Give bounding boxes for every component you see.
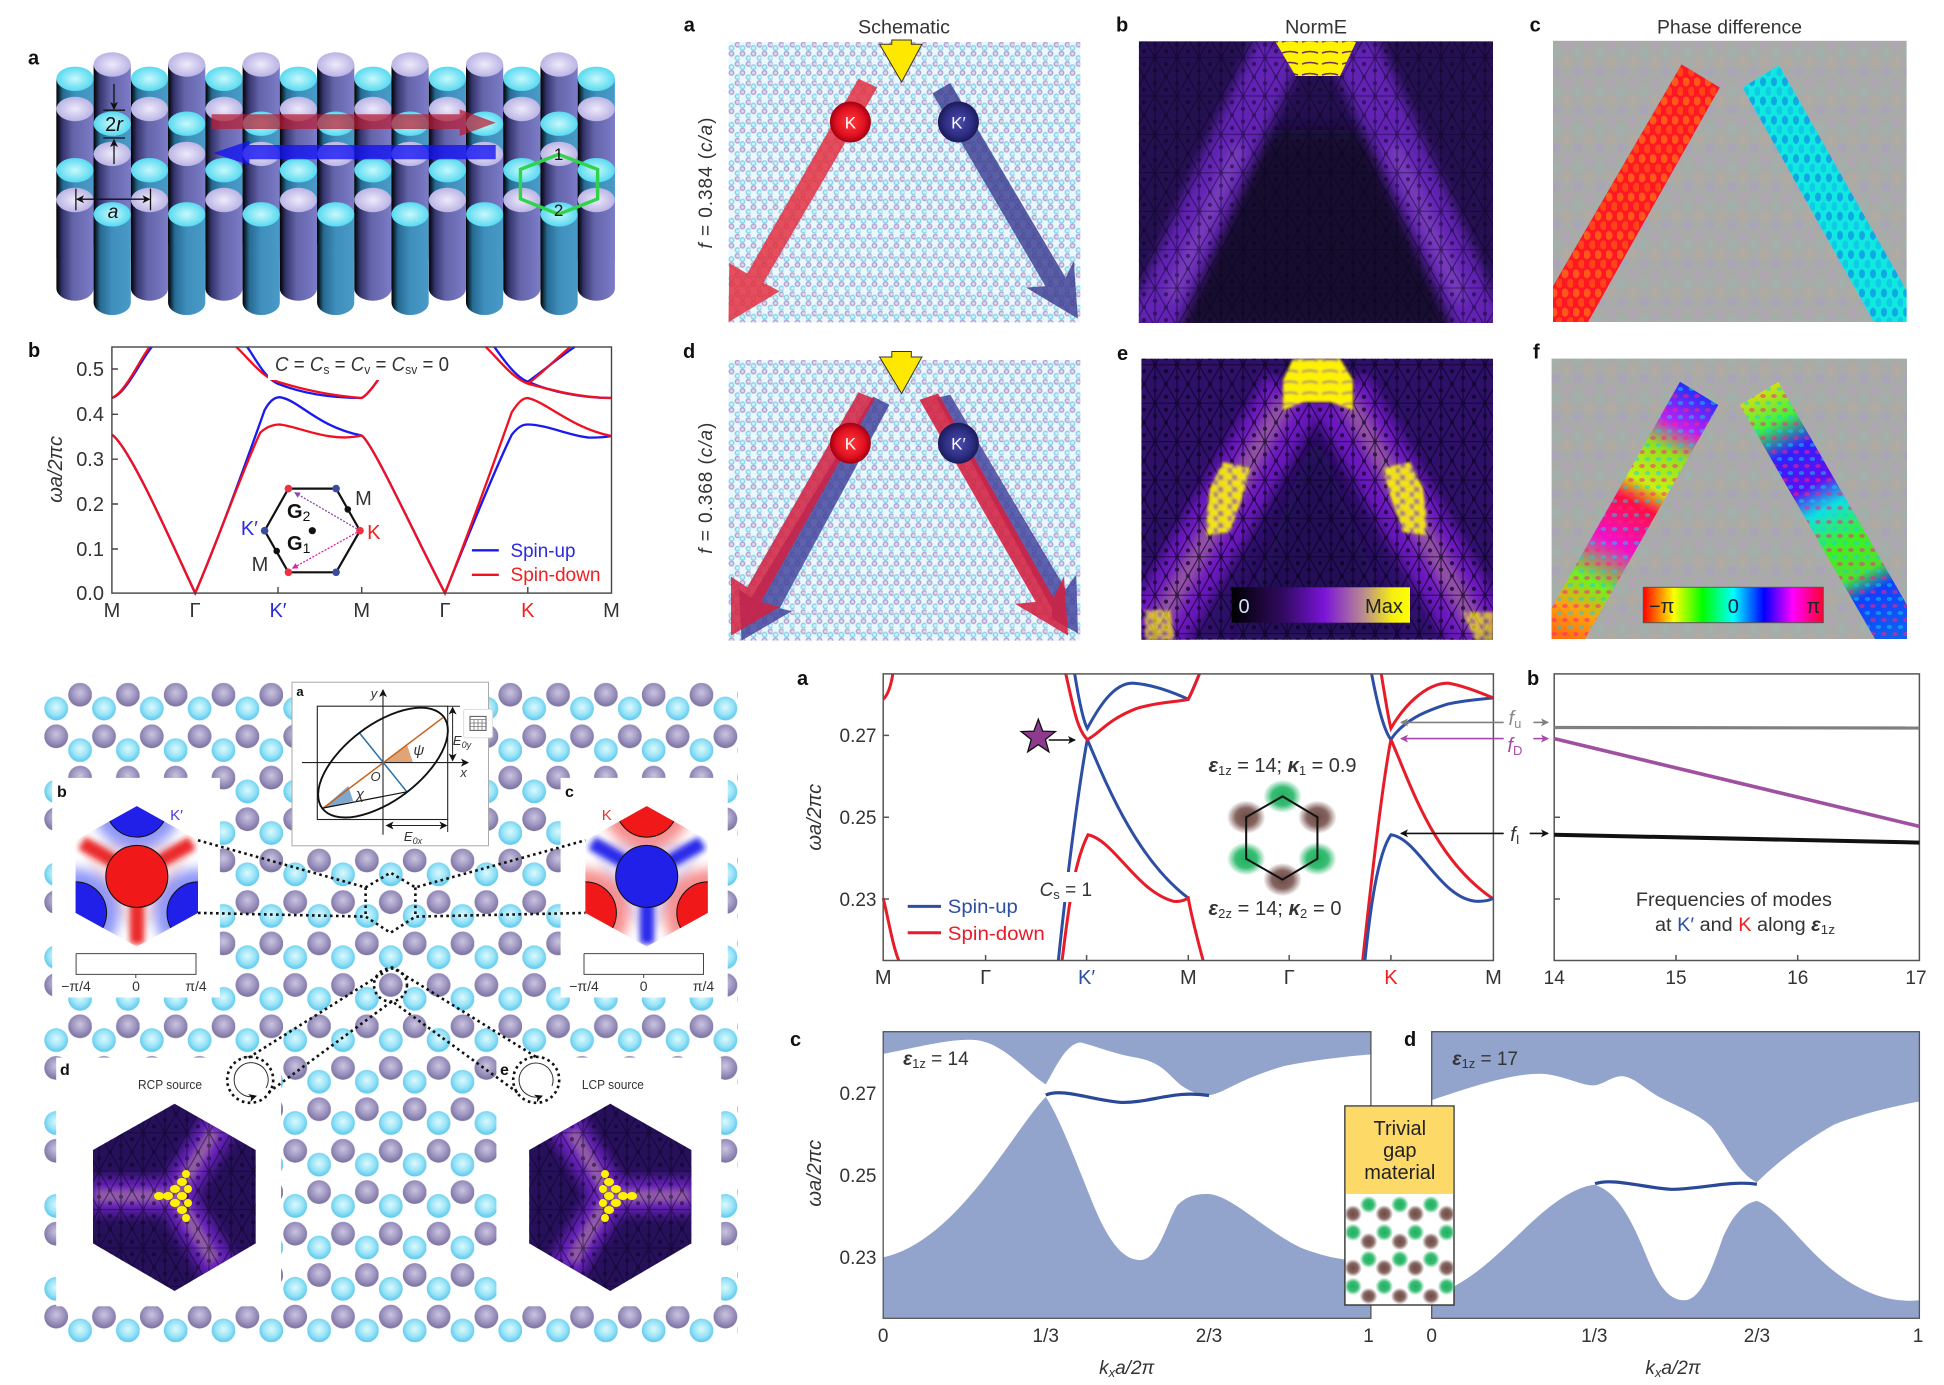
equation label: = — [370, 354, 392, 376]
label c: c — [565, 784, 574, 801]
dotted connectors — [198, 840, 585, 1103]
box: trivial gap material — [1344, 1106, 1455, 1305]
inset a: polarization ellipse: a — [296, 684, 304, 699]
panel: schematic d — [683, 341, 1080, 641]
x tick labels — [1426, 1326, 1923, 1347]
chart: band structure top-left b — [28, 340, 620, 622]
x tick labels: M — [875, 967, 892, 989]
x tick labels: 1 — [1913, 1326, 1923, 1347]
equation label: C — [392, 354, 406, 376]
Chern number label: C — [1040, 880, 1054, 901]
x tick labels: M — [603, 600, 620, 622]
band right — [1740, 382, 1907, 639]
x tick labels: K — [521, 600, 535, 622]
hexagon field K' — [76, 806, 198, 946]
unit cell inset — [1227, 780, 1337, 896]
arrow: K valley — [728, 79, 877, 322]
cyan band — [1742, 65, 1907, 322]
field hexagon e — [525, 1100, 695, 1295]
label d: d — [683, 341, 695, 363]
legend: Spin-up — [510, 541, 576, 562]
lattice — [728, 360, 1080, 641]
Chern number label — [1040, 872, 1092, 902]
parameter label 2: = 0 — [1307, 898, 1342, 920]
scale bar c: −π/4 — [569, 978, 599, 994]
label a: a — [797, 668, 809, 690]
y axis title: ωa/2πc — [804, 1140, 826, 1207]
x tick labels — [1544, 968, 1927, 989]
y tick labels — [840, 726, 876, 911]
dimension a: a — [108, 202, 118, 223]
hexagon field K': K′ — [170, 807, 183, 824]
title Schematic: Schematic — [858, 18, 950, 39]
frequency labels: u — [1514, 716, 1521, 731]
x tick labels: 1/3 — [1032, 1326, 1059, 1347]
colour bar phase: π — [1806, 596, 1820, 618]
inset a: polarization ellipse: ψ — [413, 742, 424, 759]
line fu — [1554, 726, 1919, 730]
parameter label 2: ε — [1208, 898, 1218, 920]
equation label: = 0 — [417, 354, 449, 376]
inset a: polarization ellipse: x — [459, 765, 467, 780]
sublattice labels: 1 — [554, 145, 563, 164]
lattice dots — [1344, 1196, 1455, 1304]
cylinder array — [56, 52, 615, 315]
colour bar phase: −π — [1649, 596, 1674, 618]
legend: Spin-down — [510, 565, 600, 586]
y tick labels: 0.25 — [840, 808, 876, 829]
y tick labels: 0.1 — [76, 539, 104, 561]
line fI — [1554, 835, 1919, 843]
x tick labels — [878, 1326, 1374, 1347]
equation label: v — [364, 362, 371, 377]
caption: Frequencies of modes — [1636, 890, 1832, 911]
x tick labels: 1/3 — [1581, 1326, 1608, 1347]
label c: c — [790, 1029, 801, 1051]
Brillouin zone inset: M — [355, 488, 372, 510]
icon: RCP rotation — [234, 1063, 268, 1097]
scale bar c: π/4 — [693, 978, 714, 994]
panel: phase difference f — [1533, 342, 1907, 639]
Brillouin zone inset: 2 — [303, 508, 311, 524]
parameter label 1: κ — [1288, 755, 1301, 777]
arrow: red spin-down — [212, 109, 496, 136]
caption: 1z — [1821, 922, 1835, 937]
y tick labels — [840, 1084, 876, 1269]
white panel c — [561, 778, 728, 998]
field map — [1139, 41, 1493, 330]
label a: a — [28, 48, 40, 70]
icon: LCP rotation — [519, 1063, 553, 1097]
dimension 2r — [103, 84, 125, 164]
Brillouin zone inset: M — [252, 554, 268, 576]
Brillouin zone inset: K′ — [241, 518, 258, 540]
colour bar NormE — [1232, 587, 1410, 623]
title NormE: NormE — [1285, 18, 1347, 39]
x tick labels: 17 — [1905, 968, 1927, 989]
y tick labels: 0.23 — [840, 1248, 876, 1269]
legend: Spin-up — [948, 897, 1018, 918]
frequency label: f = 0.368 (c/a) — [696, 423, 717, 554]
sublattice labels: 2 — [554, 201, 563, 220]
x tick labels: M — [353, 600, 370, 622]
parameter label 1: = 14; — [1232, 755, 1288, 777]
caption — [1636, 890, 1835, 937]
frequency labels: D — [1513, 743, 1522, 758]
parameter label: = 17 — [1475, 1049, 1518, 1070]
x axis title: x — [1654, 1365, 1662, 1380]
red band — [1553, 64, 1720, 322]
equation label: C — [351, 354, 365, 376]
arrow: K' valley — [932, 83, 1078, 319]
axes frame — [112, 347, 612, 593]
chart: mode frequencies b — [1527, 668, 1927, 989]
background — [1552, 359, 1907, 639]
band curves — [112, 347, 612, 593]
inset a: polarization ellipse: y — [370, 686, 379, 701]
y tick labels: 0.27 — [840, 1084, 876, 1105]
panel: NormE e — [1117, 343, 1493, 640]
x tick labels: K — [1384, 967, 1398, 989]
x axis title: k — [1645, 1358, 1655, 1379]
icon: star marker — [1021, 719, 1055, 752]
y tick labels: 0.3 — [76, 449, 104, 471]
chart: edge bands d — [1404, 1029, 1923, 1380]
label b: b — [57, 784, 67, 801]
chart: band structure bottom a — [797, 668, 1548, 989]
ball K — [830, 423, 871, 464]
x tick labels: 0 — [878, 1326, 888, 1347]
background — [1553, 41, 1907, 322]
axes frame — [883, 674, 1493, 960]
frequency labels: f — [1510, 824, 1516, 846]
caption RCP: RCP source — [138, 1077, 202, 1092]
y tick labels: 0.2 — [76, 494, 104, 516]
Brillouin zone inset: K — [367, 522, 381, 544]
y tick labels: 0.4 — [76, 404, 104, 426]
caption LCP: LCP source — [582, 1077, 644, 1092]
scale bar b — [61, 954, 207, 994]
edge state curve — [1046, 1093, 1209, 1102]
frequency labels — [1507, 708, 1522, 847]
x axis title: k — [1099, 1358, 1109, 1379]
x tick labels: 2/3 — [1196, 1326, 1222, 1347]
frame — [1432, 1032, 1919, 1318]
x tick labels: 16 — [1787, 968, 1808, 989]
arrow: source — [880, 40, 922, 82]
x tick labels: Γ — [1284, 967, 1295, 989]
dimension 2r: 2r — [105, 114, 124, 136]
box text: Trivial — [1374, 1118, 1426, 1140]
x tick labels: Γ — [189, 600, 201, 622]
title: Phase difference — [1657, 18, 1802, 39]
inset a: polarization ellipse: O — [370, 769, 381, 784]
box text — [1364, 1118, 1435, 1184]
arrow: source — [880, 352, 922, 394]
colour bar phase: 0 — [1728, 596, 1739, 618]
icon: calculator button — [464, 710, 492, 738]
panel: NormE b — [1116, 15, 1493, 330]
ball K': K′ — [951, 114, 966, 132]
scale bar b: π/4 — [185, 978, 207, 994]
x axis title: a/2π — [1115, 1358, 1156, 1379]
frequency label: f = 0.384 (c/a) — [696, 118, 717, 248]
x tick labels — [875, 967, 1502, 989]
bulk band fill — [1432, 1032, 1919, 1318]
x axis title: a/2π — [1661, 1358, 1702, 1379]
white panel e — [496, 1058, 721, 1306]
equation label: C = C — [275, 354, 324, 376]
frequency labels: f — [1507, 735, 1513, 757]
edge state curve — [1595, 1182, 1757, 1189]
panel: bottom-left sphere lattice — [32, 682, 752, 1342]
arrow: star pointer — [1049, 739, 1075, 741]
dimension a — [76, 189, 150, 223]
parameter label: 1z — [912, 1056, 926, 1071]
inset a: polarization ellipse: E — [404, 829, 413, 844]
parameter label: = 14 — [926, 1049, 969, 1070]
equation label — [268, 347, 451, 380]
Brillouin zone inset — [241, 485, 381, 576]
panel: schematic a — [684, 15, 1080, 322]
x tick labels: M — [1180, 967, 1197, 989]
label b: b — [1116, 15, 1128, 37]
x tick labels: M — [1485, 967, 1502, 989]
frame — [883, 1032, 1371, 1318]
parameter label: ε — [903, 1049, 913, 1070]
ball K': K′ — [951, 435, 966, 454]
parameter label 1: = 0.9 — [1306, 755, 1356, 777]
frequency labels: I — [1516, 832, 1519, 847]
white panel d — [56, 1058, 281, 1306]
inset a: polarization ellipse: 0y — [462, 740, 472, 750]
x tick labels: K′ — [269, 600, 287, 622]
x tick labels: 14 — [1544, 968, 1565, 989]
x tick labels: 15 — [1665, 968, 1687, 989]
band curves — [883, 674, 1493, 960]
Brillouin zone inset: G — [287, 501, 303, 523]
frame — [1554, 674, 1919, 960]
box text: gap — [1383, 1140, 1416, 1162]
caption: at K′ and K along ε — [1655, 915, 1820, 936]
x axis title: x — [1108, 1365, 1116, 1380]
band left — [1552, 382, 1718, 639]
mode arrows — [1401, 722, 1548, 833]
chart: edge bands c — [790, 1029, 1374, 1380]
label d: d — [60, 1062, 70, 1079]
colour bar NormE: 0 — [1238, 596, 1250, 618]
x tick labels: M — [104, 600, 120, 622]
label e: e — [500, 1062, 509, 1079]
ball K: K — [845, 435, 857, 454]
label b: b — [1527, 668, 1539, 690]
parameter label 2: 2z — [1218, 906, 1232, 921]
white panel b — [52, 778, 220, 998]
label f: f — [1533, 342, 1540, 364]
scale bar c: 0 — [640, 978, 648, 994]
hexagon field K: K — [602, 807, 612, 824]
sublattice labels — [554, 145, 563, 220]
x tick labels — [104, 600, 620, 622]
equation label: sv — [405, 362, 418, 377]
legend — [908, 897, 1045, 945]
y tick labels: 0.5 — [76, 359, 104, 381]
label a: a — [684, 15, 696, 37]
y tick labels: 0.0 — [76, 583, 104, 605]
parameter label 2: 2 — [1300, 906, 1307, 921]
Brillouin zone inset: 1 — [303, 540, 311, 556]
arrows right — [919, 394, 1078, 636]
y axis title: ωa/2πc — [45, 436, 67, 503]
inset a: polarization ellipse — [292, 682, 488, 846]
inset a: polarization ellipse: E — [453, 733, 462, 748]
parameter label 1: 1 — [1299, 763, 1306, 778]
box text: material — [1364, 1162, 1435, 1184]
x tick labels: 1 — [1363, 1326, 1374, 1347]
inset a: polarization ellipse: 0x — [413, 836, 423, 846]
label d: d — [1404, 1029, 1416, 1051]
x tick labels: 0 — [1426, 1326, 1437, 1347]
frequency labels: f — [1509, 708, 1514, 730]
parameter label: ε — [1452, 1049, 1462, 1070]
scale bar b: 0 — [132, 978, 140, 994]
unit cell hexagon — [520, 154, 598, 214]
scale bar b: −π/4 — [61, 978, 91, 994]
parameter label: 1z — [1461, 1056, 1475, 1071]
x tick labels: Γ — [980, 967, 991, 989]
colour bar phase — [1643, 587, 1823, 623]
bulk band fill — [883, 1032, 1371, 1318]
y tick labels — [76, 359, 104, 605]
ball K: K — [845, 114, 857, 132]
field hexagon d — [90, 1100, 260, 1295]
label b: b — [28, 340, 40, 362]
y tick labels: 0.23 — [840, 890, 876, 911]
legend: Spin-down — [948, 924, 1045, 945]
lattice — [728, 42, 1080, 322]
legend — [472, 541, 600, 586]
field map — [1141, 359, 1493, 640]
parameter label 1: ε — [1208, 755, 1218, 777]
ball K' — [938, 102, 979, 142]
Brillouin zone inset: G — [287, 533, 303, 555]
label c: c — [1530, 15, 1541, 37]
parameter label 2: = 14; — [1232, 898, 1289, 920]
x tick labels: Γ — [439, 600, 451, 622]
equation label: s — [323, 362, 330, 377]
Chern number label: s — [1053, 887, 1060, 902]
yellow region — [1346, 1107, 1453, 1194]
y tick labels: 0.27 — [840, 726, 876, 747]
equation label: = — [329, 354, 351, 376]
line fD — [1554, 739, 1919, 826]
ball K' — [938, 423, 979, 464]
Chern number label: = 1 — [1060, 880, 1092, 901]
ball K — [830, 102, 871, 142]
parameter label 1: 1z — [1218, 763, 1232, 778]
x tick labels: 2/3 — [1744, 1326, 1770, 1347]
panel: top-left a, cylinder lattice — [28, 48, 615, 315]
y tick labels: 0.25 — [840, 1166, 876, 1187]
arrow: blue spin-up — [213, 141, 496, 165]
inset a: polarization ellipse: χ — [354, 786, 365, 803]
arrows left — [731, 392, 889, 641]
label e: e — [1117, 343, 1128, 365]
x tick labels: K′ — [1078, 967, 1095, 989]
hexagon field K — [585, 806, 708, 946]
colour bar NormE: Max — [1365, 596, 1403, 618]
panel: phase difference c — [1530, 15, 1907, 322]
scale bar c — [569, 954, 714, 994]
parameter label 2: κ — [1289, 898, 1302, 920]
sphere lattice — [44, 683, 738, 1342]
y axis title: ωa/2πc — [804, 784, 826, 851]
